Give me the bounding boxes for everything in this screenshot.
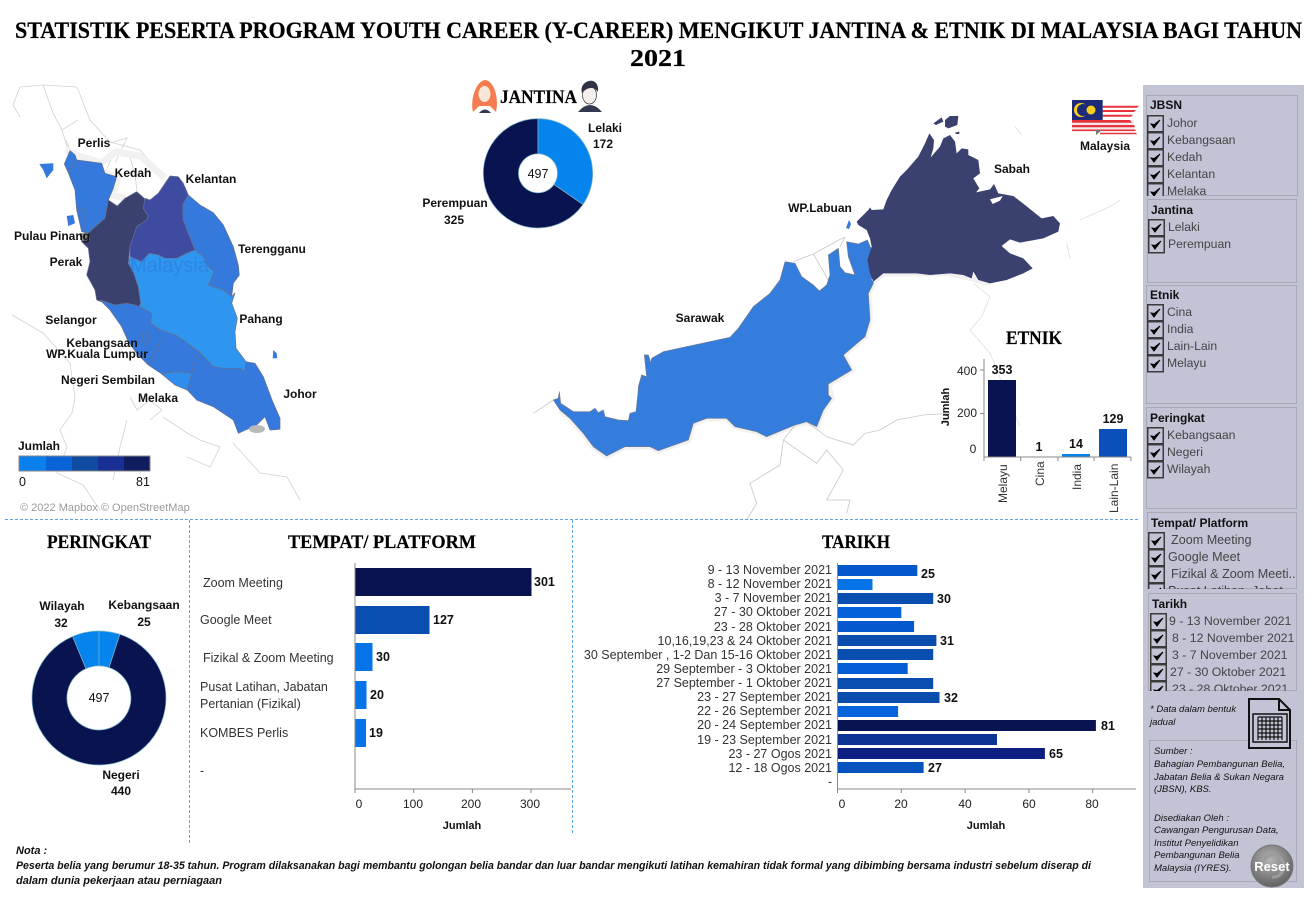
filter: Tarikh: 27 - 30 Oktober 2021	[1170, 665, 1286, 679]
bar chart: Tarikh: 23 - 27 Ogos 2021	[728, 747, 832, 761]
filter: Tempat / Platform: Pusat Latihan, Jabat..	[1168, 584, 1290, 598]
panel: sources: Sumber :	[1154, 746, 1193, 757]
bar chart: Tempat / Platform: 19	[369, 726, 383, 740]
bar chart: Tarikh: Jumlah	[967, 820, 1006, 832]
map labels: Borneo states: WP.Labuan	[788, 201, 852, 215]
filter: JBSN: Kelantan	[1167, 167, 1215, 181]
filter: Etnik: Melayu	[1167, 356, 1206, 370]
filter: Tempat / Platform: Google Meet	[1168, 550, 1241, 564]
bar chart: Tarikh: 0	[839, 797, 846, 811]
state: Negeri Sembilan	[148, 329, 198, 374]
bar chart: Tarikh: 23 - 28 Oktober 2021	[714, 620, 832, 634]
filter: Tempat / Platform	[1147, 512, 1297, 589]
map labels: Borneo states	[676, 162, 1030, 325]
bar chart: Tempat / Platform: 301	[534, 575, 555, 589]
note: Nota :	[16, 845, 48, 857]
bar chart: Tarikh: -	[828, 775, 832, 789]
bar chart: Tarikh: 20	[894, 797, 908, 811]
icon: Malaysia flag	[1072, 100, 1139, 135]
bar chart: Tarikh: 3 - 7 November 2021	[715, 591, 832, 605]
filter: JBSN: JBSN	[1150, 98, 1182, 112]
donut chart: Peringkat: 497	[89, 691, 109, 705]
filter: Jantina: Perempuan	[1168, 237, 1231, 251]
icon: man	[578, 81, 602, 112]
filter: JBSN	[1146, 96, 1298, 200]
filter: Tempat / Platform: Fizikal & Zoom Meeti..	[1171, 567, 1296, 581]
bar chart: Etnik: 1	[1036, 440, 1043, 454]
title	[15, 18, 1302, 72]
bar chart: Etnik: India	[1070, 464, 1084, 490]
map labels: Peninsular states: Negeri Sembilan	[61, 373, 155, 387]
filter: JBSN: Kedah	[1167, 150, 1202, 164]
donut chart: Jantina: 497	[528, 167, 548, 181]
filter: Tempat / Platform: Tempat/ Platform	[1151, 516, 1248, 530]
filter: Peringkat: Negeri	[1167, 445, 1203, 459]
heading: Jantina: JANTINA	[500, 87, 577, 108]
bar chart: Tarikh: 27	[928, 761, 942, 775]
filter: Tempat / Platform: Zoom Meeting	[1171, 533, 1252, 547]
donut chart: Jantina: Lelaki	[588, 121, 622, 135]
panel: sources: Disediakan Oleh :	[1154, 813, 1229, 824]
filter: Tarikh: 8 - 12 November 2021	[1172, 631, 1295, 645]
state: Selangor	[100, 300, 160, 365]
state: Sabah	[857, 116, 1060, 283]
map labels: Peninsular states: Perak	[50, 255, 83, 269]
bar chart: Etnik: Jumlah	[940, 387, 952, 426]
icon: table document	[1249, 699, 1290, 748]
map labels: Peninsular states: Kedah	[115, 166, 151, 180]
state: Pulau Pinang	[39, 163, 277, 358]
map labels: Borneo states: Sabah	[994, 162, 1030, 176]
map labels: Peninsular states: Pulau Pinang	[14, 229, 90, 243]
donut chart: Peringkat: 440	[111, 784, 131, 798]
map labels: Peninsular states: Terengganu	[238, 242, 306, 256]
panel: sources: Jabatan Belia & Sukan Negara	[1153, 772, 1284, 783]
map labels: Borneo states: Sarawak	[676, 311, 725, 325]
filter: Tarikh: Tarikh	[1152, 597, 1187, 611]
bar chart: Tempat / Platform: Google Meet	[200, 613, 272, 627]
slice: Perempuan	[483, 119, 583, 228]
bar chart: Tarikh: 65	[1049, 747, 1063, 761]
panel: sources: (JBSN), KBS.	[1154, 784, 1212, 795]
bar chart: Tempat / Platform: 200	[461, 797, 481, 811]
bar chart: Tempat / Platform: Jumlah	[443, 820, 482, 832]
map labels: Peninsular states: Selangor	[45, 313, 97, 327]
state: Perlis	[64, 151, 77, 173]
bar chart: Tarikh: 8 - 12 November 2021	[708, 577, 832, 591]
bar chart: Tarikh: 32	[944, 691, 958, 705]
panel: sources: Institut Penyelidikan	[1154, 838, 1238, 849]
bar chart: Tarikh: 10,16,19,23 & 24 Oktober 2021	[658, 634, 832, 648]
bar chart: Etnik: 400	[957, 364, 977, 378]
donut chart: Peringkat: Negeri	[102, 768, 140, 782]
map: Borneo	[533, 116, 1120, 520]
dashed dividers	[5, 520, 1140, 843]
filter: Tarikh: 23 - 28 Oktober 2021	[1172, 682, 1288, 696]
map legend: Jumlah: 0	[19, 475, 26, 489]
button: Reset	[1251, 845, 1293, 887]
panel: filter sidebar	[1143, 85, 1304, 888]
map: Peninsular Malaysia	[12, 85, 300, 510]
bar chart: Tempat / Platform: 127	[433, 613, 454, 627]
bar chart: Tarikh: 30 September , 1-2 Dan 15-16 Oktober 2021	[584, 648, 832, 662]
state: Sarawak	[553, 240, 873, 456]
note	[16, 845, 1092, 887]
map labels: Peninsular states: Kebangsaan	[66, 336, 138, 350]
bar chart: Tempat / Platform: 0	[356, 797, 363, 811]
donut chart: Peringkat: Kebangsaan	[108, 598, 180, 612]
filter: Etnik: Cina	[1167, 305, 1192, 319]
donut chart: Peringkat	[32, 598, 180, 798]
flag label: Malaysia	[1080, 139, 1130, 153]
bar chart: Etnik: 200	[957, 406, 977, 420]
filter: Etnik: India	[1167, 322, 1194, 336]
map labels: Peninsular states	[14, 136, 317, 405]
map legend: Jumlah: Jumlah	[18, 439, 60, 453]
heading: Peringkat: PERINGKAT	[47, 532, 151, 553]
map attribution: © 2022 Mapbox © OpenStreetMap	[20, 502, 190, 514]
panel: sources: Malaysia (IYRES).	[1154, 863, 1232, 874]
filter: Peringkat	[1146, 408, 1296, 508]
bar chart: Etnik: Melayu	[996, 464, 1010, 503]
icon: woman with hijab	[472, 80, 497, 113]
table data note	[1148, 704, 1237, 728]
filter: Jantina: Lelaki	[1168, 220, 1200, 234]
state: Kedah	[68, 160, 117, 233]
donut chart: Jantina: Perempuan	[422, 196, 488, 210]
bar chart: Tarikh: 31	[940, 634, 954, 648]
title: 2021	[630, 46, 686, 72]
button: Reset: Reset	[1254, 859, 1290, 874]
map labels: Peninsular states: Perlis	[78, 136, 111, 150]
bar chart: Etnik: 14	[1069, 437, 1083, 451]
state: Terengganu	[183, 195, 239, 297]
bar chart: Etnik: 0	[970, 442, 977, 456]
filter: Etnik: Etnik	[1150, 288, 1180, 302]
heading: Etnik: ETNIK	[1006, 328, 1062, 349]
filter: Peringkat: Peringkat	[1150, 411, 1205, 425]
panel: sources: Bahagian Pembangunan Belia,	[1154, 759, 1285, 770]
filter: JBSN: Melaka	[1167, 184, 1207, 198]
bar chart: Tempat / Platform: Fizikal & Zoom Meeting	[203, 651, 334, 665]
map labels: Peninsular states: Johor	[283, 387, 317, 401]
state: Johor	[187, 351, 280, 433]
map labels: Peninsular states: Pahang	[239, 312, 283, 326]
panel: sources: Cawangan Pengurusan Data,	[1154, 825, 1279, 836]
map labels: Peninsular states: WP.Kuala Lumpur	[46, 347, 148, 361]
bar chart: Etnik: Lain-Lain	[1107, 464, 1121, 513]
state: Perak	[80, 192, 148, 308]
slice: Negeri	[32, 634, 166, 765]
Singapore blob	[249, 425, 265, 433]
donut chart: Peringkat: 32	[54, 616, 68, 630]
filter: Peringkat: Wilayah	[1167, 462, 1210, 476]
bar chart: Tarikh: 25	[921, 567, 935, 581]
map labels: Peninsular states: Kelantan	[186, 172, 236, 186]
filter: Etnik: Lain-Lain	[1167, 339, 1217, 353]
bar chart: Tarikh: 20 - 24 September 2021	[697, 718, 832, 732]
bar chart: Tarikh: 80	[1085, 797, 1099, 811]
donut chart: Peringkat: 25	[137, 615, 151, 629]
bar chart: Tarikh: 23 - 27 September 2021	[697, 690, 832, 704]
bar chart: Tempat / Platform: Pertanian (Fizikal)	[200, 697, 301, 711]
filter: Jantina	[1148, 200, 1296, 282]
map labels: Peninsular states: Melaka	[138, 391, 178, 405]
filter: Jantina: Jantina	[1151, 203, 1193, 217]
panel: sources: Pembangunan Belia	[1154, 850, 1240, 861]
bar chart: Tarikh: 29 September - 3 Oktober 2021	[656, 662, 832, 676]
bar chart: Tarikh: 81	[1101, 719, 1115, 733]
map label: Malaysia basemap: Malaysia	[130, 255, 210, 277]
bar chart: Tarikh: 27 - 30 Oktober 2021	[714, 605, 832, 619]
filter: JBSN: Johor	[1167, 116, 1198, 130]
note: Peserta belia yang berumur 18-35 tahun. Program dilaksanakan bagi membantu golongan belia bandar dan luar bandar mengikuti latihan kemahiran tidak formal yang dibimbing bersama industri sebelum diserap di	[16, 860, 1092, 872]
filter: Tarikh: 3 - 7 November 2021	[1172, 648, 1288, 662]
heading: Tempat / Platform: TEMPAT/ PLATFORM	[288, 532, 476, 553]
filter: Peringkat: Kebangsaan	[1167, 428, 1235, 442]
bar chart: Tarikh: 22 - 26 September 2021	[697, 704, 832, 718]
state: WP Labuan	[846, 220, 851, 229]
panel: sources	[1150, 740, 1296, 882]
bar chart: Tempat / Platform	[200, 563, 571, 832]
map legend: Jumlah: 81	[136, 475, 150, 489]
donut chart: Jantina: 325	[444, 213, 464, 227]
filter: JBSN: Kebangsaan	[1167, 133, 1235, 147]
donut chart: Peringkat: Wilayah	[39, 599, 85, 613]
state: Melaka	[162, 372, 192, 390]
bar chart: Tarikh: 19 - 23 September 2021	[697, 733, 832, 747]
bar chart: Etnik: 353	[992, 363, 1012, 377]
bar chart: Tarikh: 60	[1022, 797, 1036, 811]
state: Pahang	[128, 250, 246, 372]
bar chart: Tarikh: 12 - 18 Ogos 2021	[728, 761, 832, 775]
bar chart: Tempat / Platform: 20	[370, 688, 384, 702]
bar chart: Tarikh: 9 - 13 November 2021	[708, 563, 832, 577]
table data note: jadual	[1148, 717, 1176, 728]
filter: Etnik	[1146, 286, 1296, 404]
bar chart: Etnik	[940, 359, 1131, 513]
state: Kelantan	[130, 176, 195, 262]
slice: Wilayah and Kebangsaan	[73, 631, 120, 669]
bar chart: Etnik: Cina	[1033, 461, 1047, 486]
bar chart: Tarikh	[584, 563, 1136, 832]
filter: Tarikh	[1148, 594, 1296, 698]
bar chart: Tarikh: 40	[958, 797, 972, 811]
bar chart: Tempat / Platform: 300	[520, 797, 540, 811]
donut chart: Jantina: 172	[593, 137, 613, 151]
table data note: * Data dalam bentuk	[1150, 704, 1237, 715]
heading: Tarikh: TARIKH	[822, 532, 890, 553]
bar chart: Tempat / Platform: -	[200, 764, 204, 778]
bar chart: Etnik: 129	[1103, 412, 1123, 426]
bar chart: Tarikh: 30	[937, 592, 951, 606]
note: dalam dunia pekerjaan atau perniagaan	[16, 875, 222, 887]
donut chart: Jantina	[422, 119, 622, 228]
bar chart: Tempat / Platform: Zoom Meeting	[203, 576, 283, 590]
bar chart: Tempat / Platform: 100	[403, 797, 423, 811]
filter: Tarikh: 9 - 13 November 2021	[1169, 614, 1292, 628]
slice: Lelaki	[538, 119, 593, 204]
bar chart: Tarikh: 27 September - 1 Oktober 2021	[656, 676, 832, 690]
bar chart: Tempat / Platform: Pusat Latihan, Jabatan	[200, 680, 328, 694]
bar chart: Tempat / Platform: 30	[376, 650, 390, 664]
bar chart: Tempat / Platform: KOMBES Perlis	[200, 726, 288, 740]
map legend: Jumlah	[18, 439, 150, 489]
